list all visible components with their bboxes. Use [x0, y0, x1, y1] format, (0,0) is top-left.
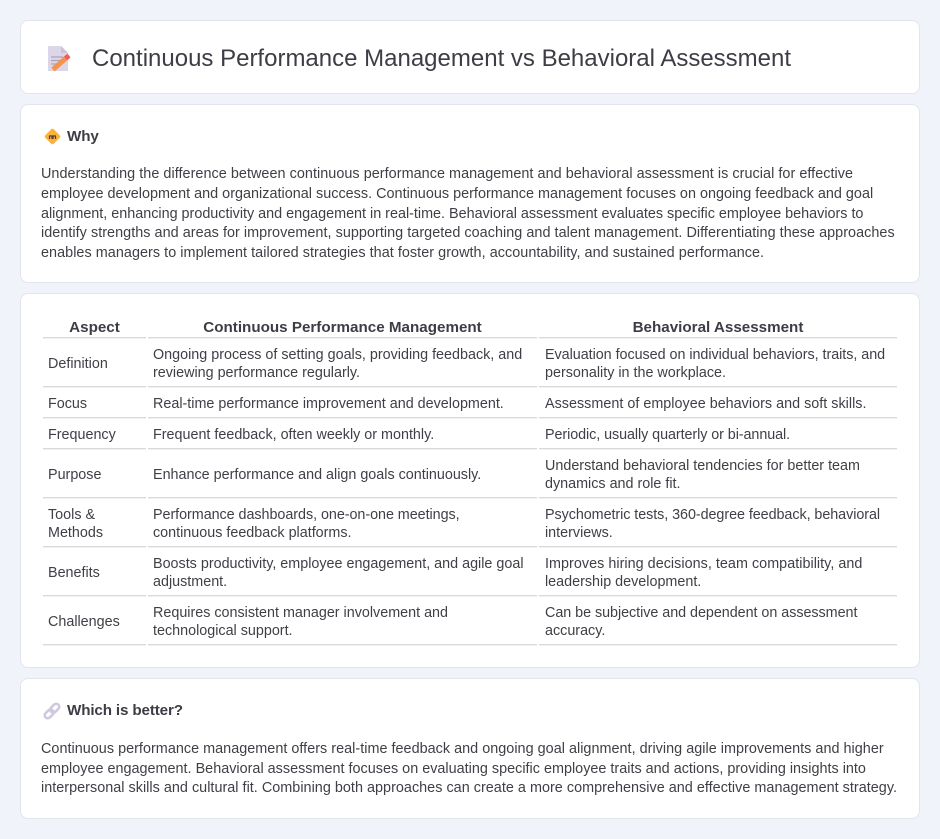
row: definition: Definition: [48, 356, 108, 372]
panel: header: [20, 20, 920, 94]
row: definition: reviewing performance regularly.: [153, 365, 360, 381]
row: challenges: Can be subjective and dependent on assessment: [545, 605, 857, 621]
row: purpose: Enhance performance and align goals continuously.: [153, 467, 481, 483]
row: purpose: [48, 458, 860, 492]
icon: chain link: [44, 702, 60, 720]
row: tools and methods: continuous feedback platforms.: [153, 525, 352, 541]
row: tools and methods: [48, 507, 880, 541]
row: challenges: Requires consistent manager involvement and: [153, 605, 448, 621]
text block: why: identify strengths and areas for improvement, supporting targeted coaching and talent management. Differentiating these approaches: [41, 225, 895, 241]
row: frequency: Periodic, usually quarterly or bi-annual.: [545, 427, 790, 443]
row: benefits: [48, 556, 862, 590]
row: frequency: Frequent feedback, often weekly or monthly.: [153, 427, 434, 443]
heading: which is better: Which is better?: [67, 702, 183, 719]
heading: why: Why: [67, 128, 99, 145]
row: tools and methods: interviews.: [545, 525, 613, 541]
row: benefits: Benefits: [48, 565, 100, 581]
text block: why: alignment, enhancing productivity and engagement in real-time. Behavioral assessment evaluates specific employee behaviors to: [41, 206, 863, 222]
text block: why: [41, 166, 895, 261]
row: focus: [48, 396, 866, 412]
table header: Continuous Performance Management: [203, 319, 482, 336]
text block: which is better: interpersonal skills and cultural fit. Combining both approaches can create a more comprehensive and effective management strategy.: [41, 780, 897, 796]
row: tools and methods: Tools &: [48, 507, 95, 523]
row: definition: [48, 347, 885, 381]
table header: Aspect: [69, 319, 120, 336]
row: definition: Ongoing process of setting goals, providing feedback, and: [153, 347, 522, 363]
text block: which is better: [41, 741, 897, 796]
row: tools and methods: Psychometric tests, 360-degree feedback, behavioral: [545, 507, 880, 523]
panel: which is better: [20, 678, 920, 819]
panel: why: [20, 104, 920, 283]
panel: comparison table: [20, 293, 920, 668]
icon: document with pencil: [48, 46, 71, 72]
table header: Behavioral Assessment: [633, 319, 803, 336]
text block: why: employee development and organizational success. Continuous performance management focuses on ongoing feedback and goal: [41, 186, 873, 202]
row: benefits: Improves hiring decisions, team compatibility, and: [545, 556, 862, 572]
row: tools and methods: Methods: [48, 525, 103, 541]
row: definition: Evaluation focused on individual behaviors, traits, and: [545, 347, 885, 363]
row: tools and methods: Performance dashboards, one-on-one meetings,: [153, 507, 460, 523]
row: challenges: accuracy.: [545, 623, 605, 639]
row: challenges: technological support.: [153, 623, 293, 639]
row: benefits: Boosts productivity, employee engagement, and agile goal: [153, 556, 524, 572]
row: frequency: Frequency: [48, 427, 116, 443]
title: Continuous Performance Management vs Behavioral Assessment: [92, 45, 791, 72]
comparison table: [43, 319, 897, 646]
row: focus: Assessment of employee behaviors and soft skills.: [545, 396, 866, 412]
row: definition: personality in the workplace.: [545, 365, 726, 381]
text block: why: Understanding the difference between continuous performance management and behavioral assessment is crucial for effective: [41, 166, 853, 182]
row: benefits: adjustment.: [153, 574, 227, 590]
row: challenges: [48, 605, 858, 639]
row: frequency: [48, 427, 790, 443]
row: focus: Real-time performance improvement and development.: [153, 396, 504, 412]
row: challenges: Challenges: [48, 614, 120, 630]
row: focus: Focus: [48, 396, 87, 412]
row: purpose: dynamics and role fit.: [545, 476, 681, 492]
text block: which is better: Continuous performance management offers real-time feedback and ongoing goal alignment, driving agile improvements and higher: [41, 741, 884, 757]
text block: which is better: employee engagement. Behavioral assessment focuses on evaluating specific employee traits and actions, providing insights into: [41, 761, 866, 777]
text block: why: enables managers to implement tailored strategies that foster growth, accountability, and sustained performance.: [41, 245, 764, 261]
row: benefits: leadership development.: [545, 574, 701, 590]
table header: [69, 319, 804, 336]
row: purpose: Purpose: [48, 467, 101, 483]
icon: warning diamond: [44, 128, 60, 144]
row: purpose: Understand behavioral tendencies for better team: [545, 458, 860, 474]
